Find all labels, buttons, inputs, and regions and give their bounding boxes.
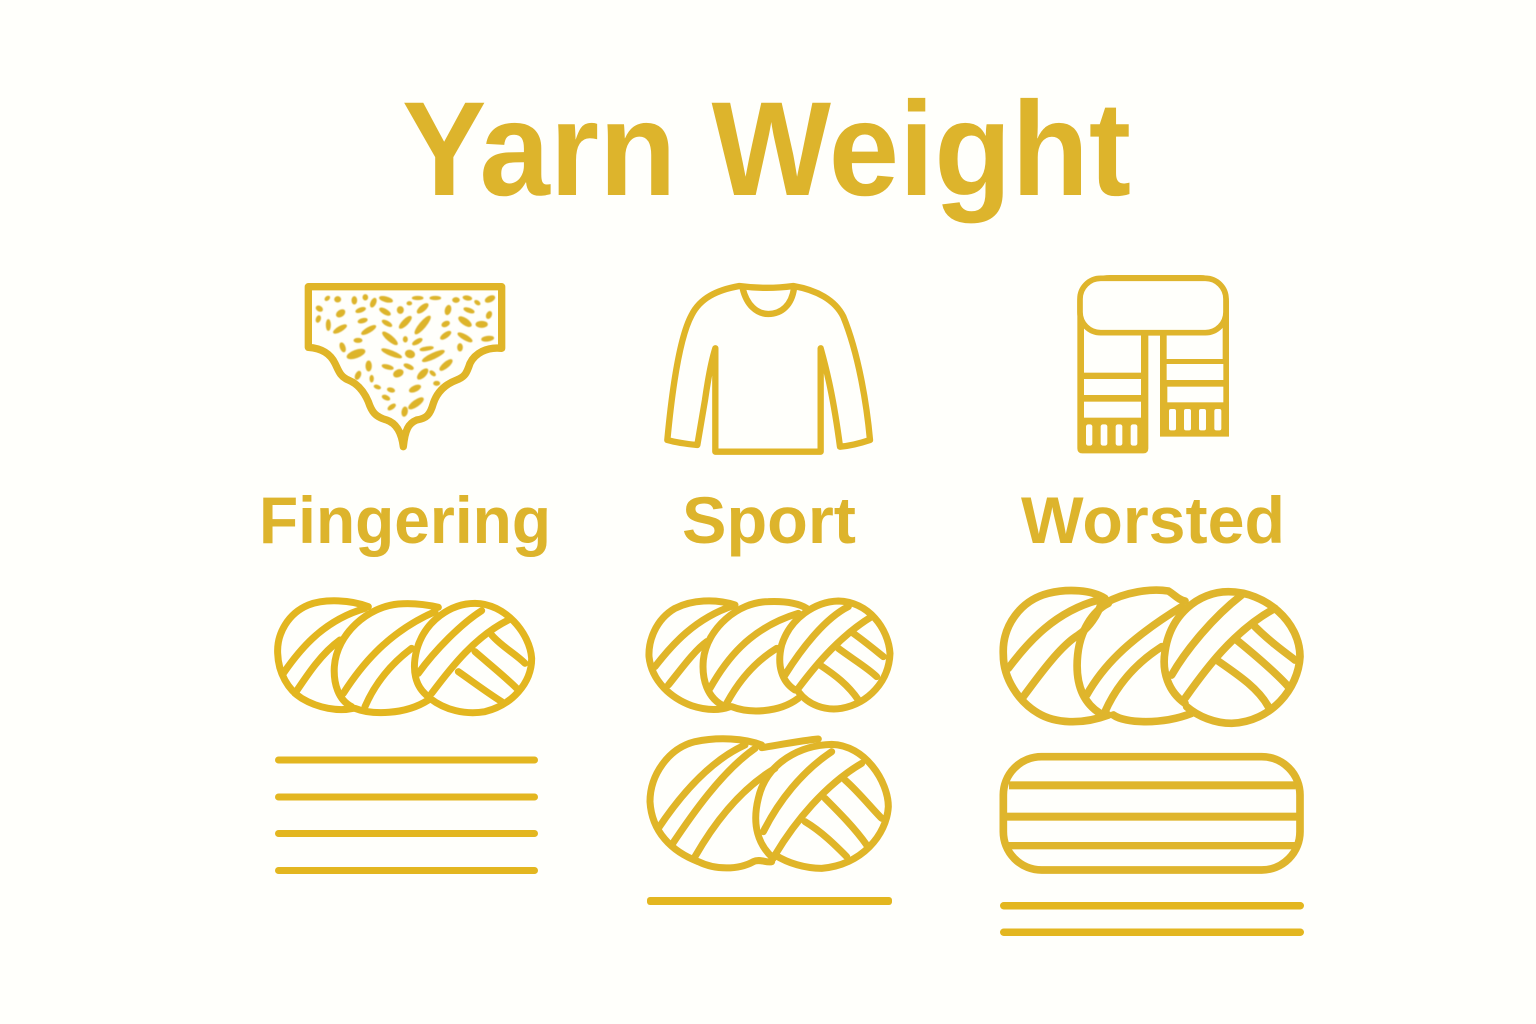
worsted weight lines (1000, 902, 1304, 936)
sport yarn skein bottom (650, 739, 888, 868)
worsted yarn skein (1003, 590, 1300, 723)
icon: scarf (1077, 275, 1229, 453)
label: Worsted: Worsted (1021, 483, 1285, 557)
worsted yarn band (1003, 757, 1300, 870)
icon: sweater (667, 286, 870, 452)
sport yarn skein top (649, 601, 890, 711)
sport weight line (647, 897, 892, 905)
label: Fingering: Fingering (259, 483, 551, 557)
title: Yarn Weight (402, 75, 1131, 224)
fingering weight lines (275, 756, 538, 874)
icon: shawl (308, 287, 502, 447)
label: Sport: Sport (682, 483, 856, 557)
fingering yarn skein (278, 601, 532, 713)
